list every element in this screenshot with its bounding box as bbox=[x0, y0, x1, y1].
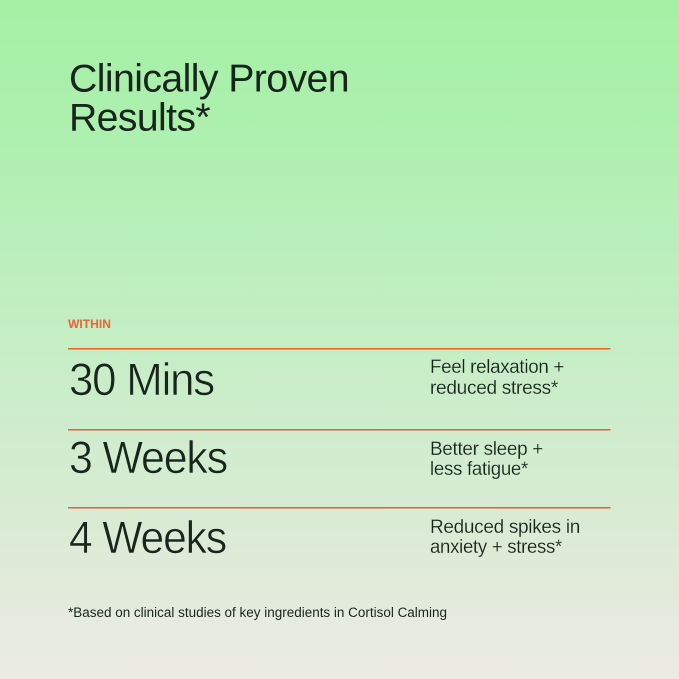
description: anxiety bbox=[430, 517, 580, 558]
description: relaxation: reduced stress* bbox=[430, 378, 559, 399]
footnote: *Based on clinical studies of key ingredients in Cortisol Calming bbox=[68, 605, 447, 620]
description: sleep bbox=[430, 439, 543, 480]
description: anxiety: Reduced spikes in bbox=[430, 517, 580, 538]
title: Clinically Proven bbox=[69, 58, 349, 100]
row: 4 weeks bbox=[68, 507, 610, 563]
row: 3 weeks bbox=[68, 429, 610, 483]
time: 30 mins: 30 Mins bbox=[69, 354, 214, 405]
description: sleep: less fatigue* bbox=[430, 459, 529, 480]
description: relaxation: Feel relaxation + bbox=[430, 357, 564, 378]
time: 3 weeks: 3 Weeks bbox=[69, 432, 227, 483]
title bbox=[69, 58, 349, 140]
description: anxiety: anxiety + stress* bbox=[430, 537, 563, 558]
time: 4 weeks: 4 Weeks bbox=[69, 512, 226, 563]
title: Results* bbox=[69, 96, 210, 140]
description: relaxation bbox=[430, 357, 564, 399]
row: 30 mins bbox=[68, 348, 610, 405]
description: sleep: Better sleep + bbox=[430, 439, 543, 460]
section label: within: WITHIN bbox=[68, 319, 111, 331]
